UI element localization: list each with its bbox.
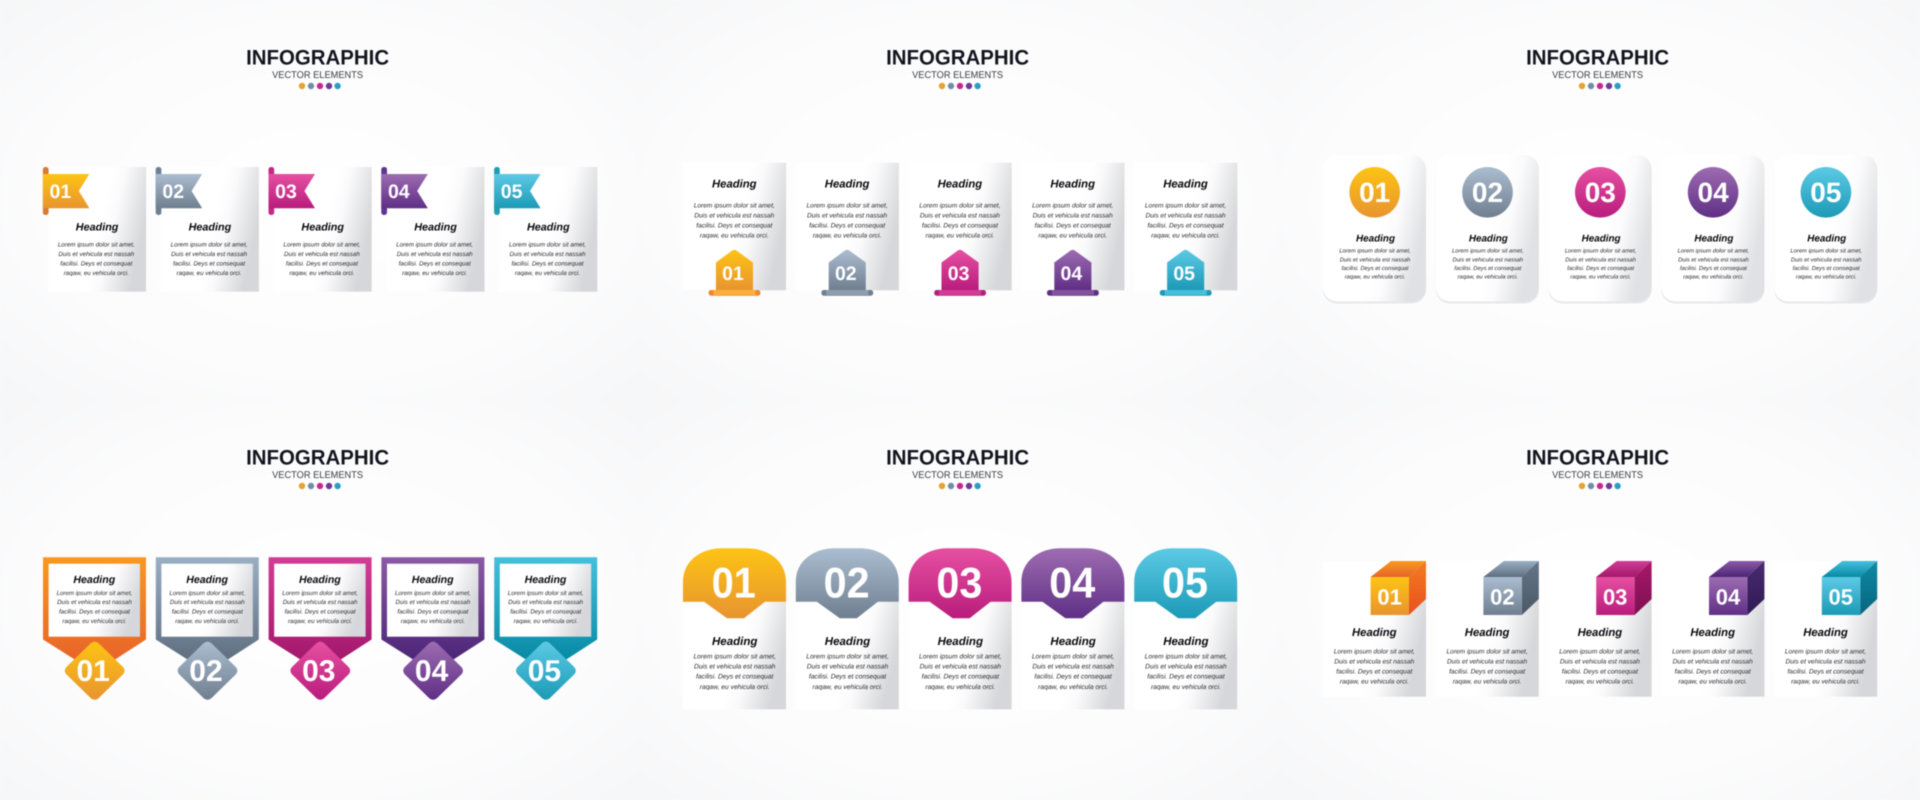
body text: Lorem ipsum dolor sit amet,: [171, 242, 248, 248]
heading: Heading: [1356, 234, 1395, 245]
body text: Duis et vehicula est nassah: [283, 599, 358, 606]
heading: Heading: [1163, 178, 1208, 190]
panel: cube cards: [1280, 400, 1920, 800]
body text: Duis et vehicula est nassah: [1447, 658, 1527, 666]
card 01: [683, 163, 786, 296]
body text: Lorem ipsum dolor sit amet,: [1334, 648, 1415, 656]
title block: INFOGRAPHIC: [246, 446, 389, 470]
icon: arrow tab 03: 03: [948, 263, 970, 285]
body text: facilisi. Deys et consequat: [809, 674, 887, 681]
heading: Heading: [1469, 234, 1508, 245]
heading: Heading: [825, 178, 869, 190]
body text: Lorem ipsum dolor sit amet,: [1672, 648, 1753, 656]
icon: number circle 05: 05: [1810, 177, 1841, 208]
title block: INFOGRAPHIC: [886, 446, 1029, 470]
icon: cube 02: 02: [1490, 584, 1515, 610]
heading: Heading: [73, 574, 116, 586]
body text: raqaw, eu vehicula orci.: [1678, 678, 1747, 686]
card 03: [1549, 561, 1652, 697]
heading: Heading: [1582, 234, 1621, 245]
body text: Lorem ipsum dolor sit amet,: [1559, 648, 1641, 656]
body text: raqaw, eu vehicula orci.: [289, 270, 354, 277]
body text: Duis et vehicula est nassah: [1033, 212, 1113, 220]
body text: Duis et vehicula est nassah: [1791, 256, 1861, 263]
icon: dome badge 04: [1021, 548, 1124, 618]
body text: Duis et vehicula est nassah: [1145, 663, 1227, 670]
body text: Duis et vehicula est nassah: [171, 251, 248, 258]
icon: diamond 04: [403, 642, 463, 700]
icon: dome badge 05: [1134, 548, 1237, 618]
body text: raqaw, eu vehicula orci.: [64, 270, 129, 277]
title block: [246, 46, 389, 89]
body text: Duis et vehicula est nassah: [694, 212, 775, 220]
body text: facilisi. Deys et consequat: [922, 222, 999, 230]
icon: number circle 04: 04: [1698, 177, 1729, 208]
icon: flag 01: 01: [50, 181, 71, 203]
title block: [1526, 46, 1669, 89]
body text: Duis et vehicula est nassah: [57, 599, 132, 606]
card 04: [1661, 561, 1764, 697]
body text: raqaw, eu vehicula orci.: [1038, 684, 1108, 691]
title block: VECTOR ELEMENTS: [1552, 470, 1644, 481]
body text: Lorem ipsum dolor sit amet,: [807, 202, 888, 210]
heading: Heading: [527, 222, 570, 234]
card 01: [43, 557, 146, 700]
heading: Heading: [712, 178, 757, 190]
body text: facilisi. Deys et consequat: [1341, 265, 1409, 272]
body text: facilisi. Deys et consequat: [1336, 668, 1413, 676]
body text: Duis et vehicula est nassah: [1453, 256, 1523, 263]
heading: Heading: [1690, 627, 1735, 639]
body text: Lorem ipsum dolor sit amet,: [395, 590, 471, 597]
body text: raqaw, eu vehicula orci.: [925, 684, 995, 691]
heading: Heading: [1578, 627, 1622, 639]
body text: raqaw, eu vehicula orci.: [514, 618, 578, 625]
icon: number circle 03: 03: [1585, 177, 1616, 208]
icon: number circle 01: [1349, 167, 1400, 218]
body text: facilisi. Deys et consequat: [1147, 222, 1225, 230]
body text: raqaw, eu vehicula orci.: [1453, 678, 1522, 686]
body text: Lorem ipsum dolor sit amet,: [283, 242, 360, 248]
icon: dome badge 01: 01: [712, 559, 756, 607]
body text: Lorem ipsum dolor sit amet,: [396, 242, 473, 248]
panel: rounded circle cards: [1280, 0, 1920, 400]
body text: Duis et vehicula est nassah: [1678, 256, 1749, 263]
icon: dome badge 02: 02: [824, 559, 870, 607]
heading: Heading: [1465, 627, 1509, 639]
card 05: [1774, 155, 1877, 304]
body text: Duis et vehicula est nassah: [920, 663, 1001, 670]
body text: raqaw, eu vehicula orci.: [177, 270, 242, 277]
heading: Heading: [76, 222, 119, 234]
body text: facilisi. Deys et consequat: [1787, 668, 1865, 676]
card 02: [796, 163, 899, 296]
icon: dome badge 01: [683, 548, 786, 618]
body text: Lorem ipsum dolor sit amet,: [1032, 653, 1114, 660]
card 04: [1661, 155, 1764, 304]
title block: [886, 46, 1029, 89]
body text: facilisi. Deys et consequat: [1147, 674, 1226, 681]
body text: facilisi. Deys et consequat: [510, 608, 581, 615]
body text: facilisi. Deys et consequat: [285, 608, 356, 615]
body text: raqaw, eu vehicula orci.: [1458, 274, 1518, 281]
body text: raqaw, eu vehicula orci.: [1038, 232, 1107, 240]
body text: facilisi. Deys et consequat: [1449, 668, 1526, 676]
icon: number circle 02: 02: [1472, 177, 1503, 208]
icon: cube 05: 05: [1829, 584, 1853, 610]
icon: arrow tab 05: 05: [1173, 263, 1195, 285]
body text: Lorem ipsum dolor sit amet,: [1447, 648, 1528, 656]
icon: diamond 05: 05: [528, 655, 561, 688]
body text: raqaw, eu vehicula orci.: [700, 684, 770, 691]
icon: flag 03: 03: [275, 181, 297, 203]
body text: raqaw, eu vehicula orci.: [1566, 678, 1634, 686]
body text: facilisi. Deys et consequat: [696, 674, 774, 681]
title block: VECTOR ELEMENTS: [1552, 70, 1644, 81]
heading: Heading: [414, 222, 457, 234]
body text: raqaw, eu vehicula orci.: [175, 618, 239, 625]
icon: arrow tab 02: 02: [835, 263, 857, 285]
icon: diamond 04: 04: [415, 655, 449, 688]
body text: Lorem ipsum dolor sit amet,: [58, 242, 135, 248]
body text: Lorem ipsum dolor sit amet,: [694, 202, 775, 210]
body text: Duis et vehicula est nassah: [1785, 658, 1866, 666]
body text: raqaw, eu vehicula orci.: [926, 232, 994, 240]
body text: raqaw, eu vehicula orci.: [401, 618, 465, 625]
icon: flag 05: 05: [501, 181, 523, 203]
title block: VECTOR ELEMENTS: [272, 470, 364, 481]
body text: Lorem ipsum dolor sit amet,: [508, 590, 584, 597]
body text: raqaw, eu vehicula orci.: [1151, 232, 1220, 240]
card 02: [1436, 155, 1539, 304]
title block: [246, 446, 389, 489]
icon: cube 03: 03: [1603, 584, 1627, 610]
body text: facilisi. Deys et consequat: [922, 674, 1000, 681]
card 02: [796, 548, 899, 709]
body text: Lorem ipsum dolor sit amet,: [1032, 202, 1113, 210]
body text: Duis et vehicula est nassah: [510, 251, 586, 258]
card 03: [909, 163, 1012, 296]
body text: raqaw, eu vehicula orci.: [813, 232, 882, 240]
heading: Heading: [1050, 178, 1095, 190]
panel: framed diamond cards: [0, 400, 640, 800]
heading: Heading: [299, 574, 341, 586]
body text: Lorem ipsum dolor sit amet,: [169, 590, 245, 597]
body text: Lorem ipsum dolor sit amet,: [806, 653, 889, 660]
icon: flag 04: 04: [388, 181, 410, 203]
body text: facilisi. Deys et consequat: [1034, 674, 1113, 681]
card 05: [494, 557, 597, 700]
body text: Lorem ipsum dolor sit amet,: [919, 202, 1001, 210]
heading: Heading: [301, 222, 344, 234]
body text: raqaw, eu vehicula orci.: [1151, 684, 1221, 691]
panel: flag cards: [0, 0, 640, 400]
body text: Duis et vehicula est nassah: [508, 599, 584, 606]
body text: facilisi. Deys et consequat: [1793, 265, 1860, 272]
body text: facilisi. Deys et consequat: [1562, 668, 1639, 676]
icon: arrow tab 01: 01: [722, 263, 744, 285]
body text: raqaw, eu vehicula orci.: [1796, 274, 1856, 281]
card 05: [1774, 561, 1877, 697]
panel: dome header cards: [640, 400, 1280, 800]
card 03: [909, 548, 1012, 709]
icon: diamond 03: [290, 642, 350, 700]
title block: [1526, 446, 1669, 489]
title block: VECTOR ELEMENTS: [912, 70, 1004, 81]
body text: facilisi. Deys et consequat: [511, 260, 584, 268]
body text: Duis et vehicula est nassah: [397, 251, 473, 258]
body text: Lorem ipsum dolor sit amet,: [57, 590, 132, 597]
title block: INFOGRAPHIC: [246, 46, 389, 70]
card 02: [156, 557, 259, 700]
heading: Heading: [1352, 627, 1397, 639]
body text: Duis et vehicula est nassah: [396, 599, 471, 606]
body text: Lorem ipsum dolor sit amet,: [1145, 202, 1226, 210]
heading: Heading: [189, 222, 232, 234]
icon: dome badge 02: [796, 548, 899, 618]
body text: Duis et vehicula est nassah: [58, 251, 135, 258]
icon: number circle 01: 01: [1359, 177, 1390, 208]
body text: Lorem ipsum dolor sit amet,: [1339, 248, 1411, 255]
body text: Duis et vehicula est nassah: [1560, 658, 1640, 666]
body text: facilisi. Deys et consequat: [1454, 265, 1522, 272]
icon: flag 02: 02: [162, 181, 184, 203]
icon: diamond 01: 01: [77, 655, 110, 688]
body text: raqaw, eu vehicula orci.: [402, 270, 467, 277]
body text: Lorem ipsum dolor sit amet,: [1785, 648, 1866, 656]
body text: Duis et vehicula est nassah: [1032, 663, 1114, 670]
body text: facilisi. Deys et consequat: [60, 260, 133, 268]
heading: Heading: [1050, 636, 1096, 648]
body text: Duis et vehicula est nassah: [920, 212, 1000, 220]
body text: Lorem ipsum dolor sit amet,: [1452, 248, 1524, 255]
body text: Lorem ipsum dolor sit amet,: [1678, 248, 1749, 255]
card 01: [683, 548, 786, 709]
body text: facilisi. Deys et consequat: [1680, 265, 1747, 272]
heading: Heading: [825, 636, 870, 648]
body text: Duis et vehicula est nassah: [694, 663, 776, 670]
heading: Heading: [938, 178, 982, 190]
card 05: [1134, 548, 1237, 709]
body text: facilisi. Deys et consequat: [59, 608, 130, 615]
heading: Heading: [1803, 627, 1848, 639]
body text: Lorem ipsum dolor sit amet,: [282, 590, 358, 597]
body text: Duis et vehicula est nassah: [1565, 256, 1636, 263]
card 02: [156, 167, 259, 292]
icon: dome badge 03: [909, 548, 1012, 618]
body text: Lorem ipsum dolor sit amet,: [1790, 248, 1862, 255]
title block: VECTOR ELEMENTS: [912, 470, 1004, 481]
body text: facilisi. Deys et consequat: [1035, 222, 1112, 230]
body text: Lorem ipsum dolor sit amet,: [1565, 248, 1636, 255]
body text: facilisi. Deys et consequat: [286, 260, 358, 268]
body text: Lorem ipsum dolor sit amet,: [693, 653, 776, 660]
icon: dome badge 05: 05: [1162, 559, 1208, 607]
card 03: [1549, 155, 1652, 304]
body text: raqaw, eu vehicula orci.: [62, 618, 127, 625]
card 05: [1134, 163, 1237, 296]
card 01: [1323, 155, 1426, 304]
icon: diamond 05: [516, 642, 576, 700]
body text: raqaw, eu vehicula orci.: [813, 684, 883, 691]
body text: Duis et vehicula est nassah: [1340, 256, 1410, 263]
icon: arrow tab 04: 04: [1061, 263, 1082, 285]
body text: raqaw, eu vehicula orci.: [700, 232, 769, 240]
body text: Duis et vehicula est nassah: [1673, 658, 1753, 666]
icon: diamond 02: [178, 642, 237, 700]
body text: Duis et vehicula est nassah: [1145, 212, 1226, 220]
body text: raqaw, eu vehicula orci.: [1345, 274, 1405, 281]
body text: facilisi. Deys et consequat: [809, 222, 886, 230]
card 04: [381, 167, 484, 292]
card 05: [494, 167, 597, 292]
body text: Lorem ipsum dolor sit amet,: [919, 653, 1002, 660]
body text: Duis et vehicula est nassah: [1334, 658, 1415, 666]
body text: raqaw, eu vehicula orci.: [515, 270, 580, 277]
icon: number circle 03: [1575, 167, 1626, 218]
card 04: [1021, 548, 1124, 709]
icon: number circle 04: [1688, 167, 1738, 218]
body text: raqaw, eu vehicula orci.: [1791, 678, 1860, 686]
body text: Duis et vehicula est nassah: [170, 599, 245, 606]
body text: facilisi. Deys et consequat: [1675, 668, 1752, 676]
icon: diamond 01: [65, 642, 125, 700]
icon: diamond 03: 03: [302, 655, 335, 688]
panel: arrow tab cards: [640, 0, 1280, 400]
icon: cube 04: 04: [1716, 584, 1741, 610]
card 04: [381, 557, 484, 700]
heading: Heading: [938, 636, 983, 648]
body text: facilisi. Deys et consequat: [397, 608, 469, 615]
body text: facilisi. Deys et consequat: [172, 608, 243, 615]
heading: Heading: [712, 636, 757, 648]
title block: INFOGRAPHIC: [886, 46, 1029, 70]
body text: raqaw, eu vehicula orci.: [288, 618, 352, 625]
body text: facilisi. Deys et consequat: [399, 260, 471, 268]
body text: facilisi. Deys et consequat: [1567, 265, 1634, 272]
icon: diamond 02: 02: [189, 655, 223, 688]
heading: Heading: [525, 574, 567, 586]
heading: Heading: [1163, 636, 1209, 648]
card 01: [1323, 561, 1426, 697]
title block: [886, 446, 1029, 489]
title block: INFOGRAPHIC: [1526, 446, 1669, 470]
body text: facilisi. Deys et consequat: [173, 260, 245, 268]
body text: raqaw, eu vehicula orci.: [1570, 274, 1631, 281]
heading: Heading: [412, 574, 454, 586]
body text: Lorem ipsum dolor sit amet,: [1145, 653, 1227, 660]
body text: Duis et vehicula est nassah: [807, 212, 887, 220]
icon: dome badge 03: 03: [936, 559, 982, 607]
body text: raqaw, eu vehicula orci.: [1683, 274, 1744, 281]
icon: number circle 02: [1462, 167, 1513, 218]
body text: Lorem ipsum dolor sit amet,: [509, 242, 586, 248]
card 01: [43, 167, 146, 292]
body text: Duis et vehicula est nassah: [284, 251, 360, 258]
body text: raqaw, eu vehicula orci.: [1340, 678, 1409, 686]
icon: cube 01: 01: [1377, 584, 1402, 610]
body text: facilisi. Deys et consequat: [696, 222, 773, 230]
card 02: [1436, 561, 1539, 697]
icon: dome badge 04: 04: [1049, 559, 1095, 607]
body text: Duis et vehicula est nassah: [807, 663, 888, 670]
card 03: [269, 557, 372, 700]
heading: Heading: [186, 574, 229, 586]
title block: VECTOR ELEMENTS: [272, 70, 364, 81]
title block: INFOGRAPHIC: [1526, 46, 1669, 70]
heading: Heading: [1694, 234, 1733, 245]
icon: number circle 05: [1801, 167, 1851, 218]
heading: Heading: [1807, 234, 1846, 245]
card 03: [268, 167, 372, 292]
card 04: [1021, 163, 1124, 296]
